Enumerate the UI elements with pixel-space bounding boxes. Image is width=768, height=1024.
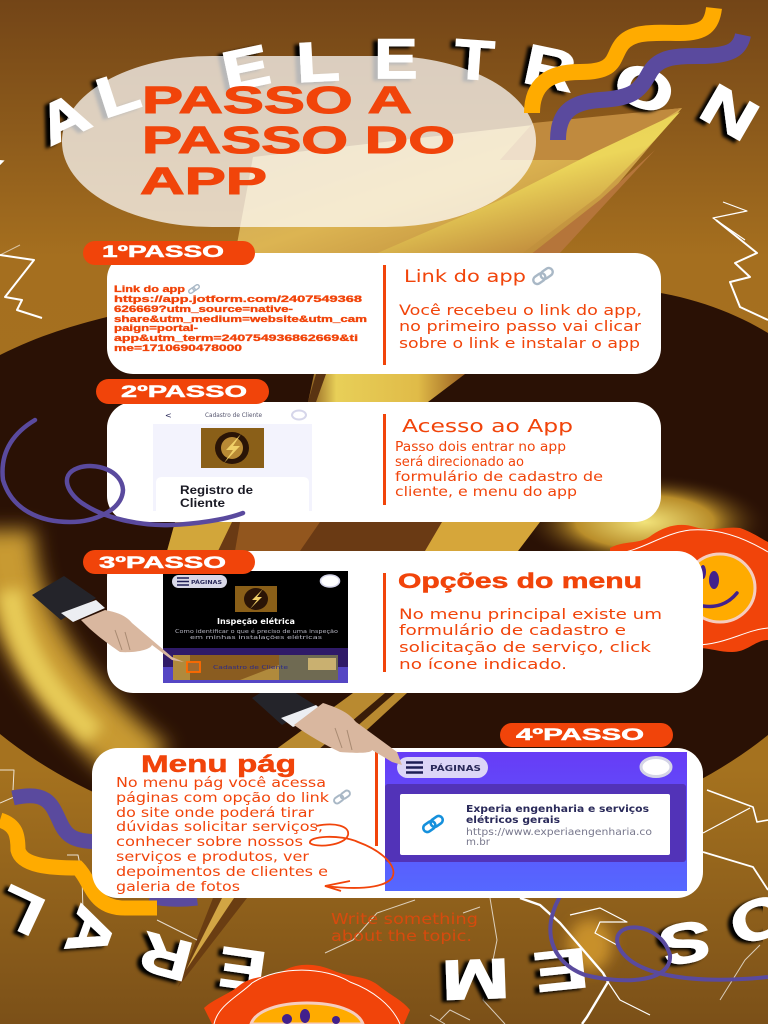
step 4 screenshot: PÁGINAS bbox=[430, 762, 481, 773]
step 1 link text: 626669?utm_source=native- bbox=[114, 304, 293, 315]
step 2 card bbox=[107, 402, 661, 522]
step 4 heading: Menu pág bbox=[141, 751, 296, 778]
step 2 screenshot: < bbox=[165, 411, 172, 420]
squiggles: bottom left bbox=[0, 796, 197, 908]
step 3 label bbox=[83, 550, 255, 574]
step 2 body text: formulário de cadastro de bbox=[395, 470, 603, 485]
step 1 label: 1ºPASSO bbox=[102, 242, 224, 261]
step 1 card bbox=[107, 253, 661, 374]
arc of letters: ELETRON: A bbox=[53, 898, 128, 967]
arc of letters: ELETRON: L bbox=[89, 58, 147, 130]
step 1 link text: https://app.jotform.com/2407549368 bbox=[114, 294, 362, 305]
arc of letters: ELETRON: E bbox=[375, 27, 417, 90]
step 1 link text: me=1710690478000 bbox=[114, 343, 242, 354]
step 2 heading: Acesso ao App bbox=[402, 416, 573, 437]
step 2 screenshot: Registro de bbox=[180, 483, 253, 497]
step 3 card bbox=[107, 551, 703, 693]
step 2 label: 2ºPASSO bbox=[121, 382, 247, 401]
step 2 screenshot: Cliente bbox=[180, 496, 225, 510]
step 3 screenshot: em minhas instalações elétricas bbox=[190, 634, 322, 641]
step 4 screenshot: m.br bbox=[466, 837, 490, 848]
squiggle: left loop bbox=[2, 420, 243, 525]
squiggle: bottom right bbox=[550, 885, 768, 980]
stamp: right smiley bbox=[610, 525, 768, 652]
step 1 body text bbox=[399, 303, 642, 352]
arc of letters: ELETRON: L bbox=[295, 30, 341, 94]
hand: pointing at icon bbox=[32, 576, 184, 662]
step 1 label bbox=[83, 241, 255, 265]
hand: pointing at menu bbox=[252, 682, 402, 765]
step 1 body text: Você recebeu o link do app, bbox=[399, 303, 642, 319]
arc of letters: ELETRON: M bbox=[441, 947, 511, 1012]
stamp: bottom smiley bbox=[204, 965, 410, 1024]
arc of letters: ELETRON: A bbox=[29, 81, 99, 158]
title bbox=[140, 80, 455, 203]
step 1 link text: Link do app bbox=[114, 284, 185, 295]
step 3 body text: no ícone indicado. bbox=[399, 657, 567, 673]
step 4 body text: No menu pág você acessa bbox=[116, 775, 326, 791]
step 4 divider bbox=[375, 748, 378, 846]
step 3 screenshot: Como identificar o que é preciso de uma inspeção bbox=[175, 628, 339, 635]
placeholder caption: Write something bbox=[331, 910, 478, 928]
step 3 screenshot: Inspeção elétrica bbox=[217, 617, 295, 626]
arc of letters: ELETRON: E bbox=[531, 936, 591, 1004]
step 1 link text: paign=portal- bbox=[114, 323, 198, 334]
placeholder caption bbox=[331, 910, 478, 945]
squiggle: top right bbox=[532, 8, 743, 140]
step 2 body text: será direcionado ao bbox=[395, 455, 524, 470]
step 2 body text: cliente, e menu do app bbox=[395, 485, 577, 500]
step 4 body text: conhecer sobre nossos bbox=[116, 834, 303, 850]
step 4 body text: galeria de fotos bbox=[116, 879, 240, 895]
step 4 body text: depoimentos de clientes e bbox=[116, 864, 328, 880]
step 1 link text: app&utm_term=240754936862669&ti bbox=[114, 333, 358, 344]
step 3 heading: Opções do menu bbox=[398, 570, 642, 593]
step 3 screenshot bbox=[163, 571, 348, 683]
arc of letters: ELETRON: R bbox=[134, 920, 199, 992]
step 4 body text: páginas com opção do link bbox=[116, 790, 329, 806]
step 2 label bbox=[96, 379, 269, 404]
step 3 label: 3ºPASSO bbox=[99, 553, 226, 572]
step 3 divider bbox=[383, 573, 386, 672]
step 4 screenshot: https://www.experiaengenharia.co bbox=[466, 827, 652, 838]
step 2 screenshot: Cadastro de Cliente bbox=[205, 412, 262, 419]
arc of letters: ELETRON: N bbox=[690, 72, 768, 154]
title: APP bbox=[140, 161, 267, 203]
step 4 body text bbox=[116, 775, 329, 895]
arc of letters: ELETRON: E bbox=[217, 34, 275, 104]
step 4 card bbox=[92, 748, 703, 898]
title backdrop bbox=[62, 56, 536, 227]
step 2 screenshot bbox=[153, 410, 312, 511]
arrow: loop bbox=[310, 824, 393, 891]
step 1 link text bbox=[114, 284, 367, 354]
step 3 screenshot: PÁGINAS bbox=[191, 579, 222, 586]
icon: small link bbox=[188, 284, 200, 294]
step 4 body text: do site onde poderá tirar bbox=[116, 805, 315, 821]
step 4 screenshot bbox=[385, 752, 687, 891]
step 3 body text: formulário de cadastro e bbox=[399, 623, 626, 639]
arc of letters: ELETRON: E bbox=[215, 935, 270, 1002]
step 4 label: 4ºPASSO bbox=[516, 725, 644, 744]
step 4 screenshot: Experia engenharia e serviços bbox=[466, 804, 649, 815]
step 1 heading: Link do app bbox=[404, 267, 526, 287]
step 2 body text bbox=[395, 440, 603, 500]
title: PASSO DO bbox=[142, 120, 455, 162]
icon: link heading bbox=[532, 266, 554, 286]
placeholder caption: about the topic. bbox=[331, 927, 472, 945]
step 2 divider bbox=[383, 414, 386, 505]
arc of letters: ELETRON: R bbox=[519, 33, 581, 104]
step 3 body text: solicitação de serviço, click bbox=[399, 640, 652, 656]
step 4 body text: serviços e produtos, ver bbox=[116, 849, 310, 865]
step 3 body text: No menu principal existe um bbox=[399, 607, 662, 623]
step 4 body text: dúvidas solicitar serviços, bbox=[116, 819, 323, 835]
step 3 body text bbox=[399, 607, 662, 673]
arc of letters: ELETRON: T bbox=[453, 27, 496, 92]
step 1 body text: sobre o link e instalar o app bbox=[399, 336, 640, 352]
title: PASSO A bbox=[142, 80, 412, 122]
step 4 screenshot: elétricos gerais bbox=[466, 814, 560, 826]
step 1 body text: no primeiro passo vai clicar bbox=[399, 319, 641, 335]
icon: link gray bbox=[333, 789, 351, 805]
step 2 body text: Passo dois entrar no app bbox=[395, 440, 566, 455]
step 1 link text: share&utm_medium=website&utm_cam bbox=[114, 314, 367, 325]
arc of letters: ELETRON: S bbox=[655, 907, 715, 977]
step 4 label bbox=[500, 723, 673, 747]
step 3 screenshot: Cadastro de Cliente bbox=[213, 665, 289, 671]
step 1 divider bbox=[383, 265, 386, 365]
arc of letters: ELETRON: O bbox=[605, 49, 683, 129]
